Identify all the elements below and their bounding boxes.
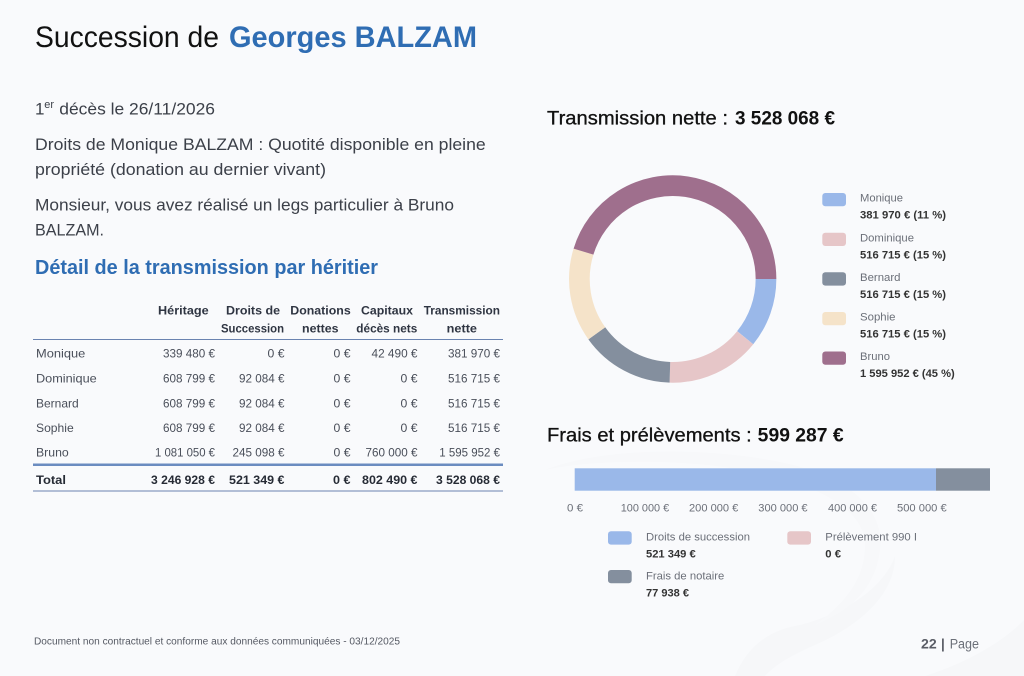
legend item: frais de notaire: Frais de notaire — [646, 571, 724, 583]
text block: introduction: décès le 26/11/2026 — [59, 100, 215, 119]
row: Total: 521 349 € — [229, 473, 285, 487]
heading: transmission nette — [547, 108, 835, 129]
donut chart: transmission nette — [579, 186, 766, 372]
row: Dominique: 608 799 € — [163, 371, 215, 385]
segment: Bernard — [597, 333, 670, 372]
legend item: Sophie — [822, 312, 946, 340]
segment: Sophie — [579, 252, 597, 333]
legend item: Bruno: Bruno — [860, 351, 890, 363]
page number: | — [941, 637, 945, 652]
heading: détail de la transmission: Détail de la transmission par héritier — [35, 257, 378, 279]
footer note: Document non contractuel et conforme aux données communiquées - 03/12/2025 — [34, 636, 400, 648]
table: transmission par héritier — [33, 304, 503, 492]
axis labels: 100 000 € — [621, 502, 669, 514]
text block: introduction: er — [44, 99, 54, 111]
row: Bernard: 608 799 € — [163, 397, 215, 411]
stacked bar chart: frais et prélèvements — [567, 468, 990, 514]
legend item: Dominique: 516 715 € (15 %) — [860, 249, 946, 261]
legend item: Bernard: 516 715 € (15 %) — [860, 289, 946, 301]
table header: Capitaux — [361, 304, 413, 318]
legend item: prélèvement 990 I: Prélèvement 990 I — [825, 532, 917, 544]
row: Dominique: 0 € — [400, 371, 418, 385]
row: Dominique: 516 715 € — [448, 371, 500, 385]
axis labels: 200 000 € — [689, 502, 738, 514]
row: Monique: 0 € — [268, 347, 285, 361]
legend: transmission nette — [822, 193, 955, 380]
segment: Monique — [745, 279, 766, 338]
title: Georges BALZAM — [229, 21, 477, 54]
text block: introduction — [35, 99, 486, 240]
row: Total: Total — [36, 473, 66, 487]
legend item: Dominique — [822, 232, 946, 261]
heading: frais et prélèvements: 599 287 € — [758, 426, 844, 447]
legend item: Monique: Monique — [860, 193, 903, 205]
row: Dominique — [36, 371, 500, 385]
row: Bruno: 1 081 050 € — [155, 446, 215, 460]
heading: frais et prélèvements — [547, 426, 844, 447]
row: Total: 0 € — [333, 473, 351, 487]
legend item: prélèvement 990 I: 0 € — [825, 549, 841, 561]
table header: nettes — [302, 321, 339, 335]
row: Bruno: 0 € — [334, 446, 351, 460]
text block: introduction: 1 — [35, 100, 44, 119]
legend item: Monique — [822, 193, 946, 222]
title: Succession de — [35, 21, 219, 54]
row: Monique: 381 970 € — [448, 347, 500, 361]
text block: introduction: Droits de Monique BALZAM : Quotité disponible en pleine — [35, 135, 486, 154]
legend item: Bernard — [822, 272, 946, 301]
page number: Page — [950, 637, 979, 652]
axis labels: 500 000 € — [897, 502, 947, 514]
heading: frais et prélèvements: Frais et prélèvements : — [547, 426, 752, 447]
row: Monique: Monique — [36, 347, 86, 361]
legend item: Dominique: Dominique — [860, 232, 914, 244]
row: Bruno: 1 595 952 € — [439, 446, 500, 460]
legend item: Sophie: Sophie — [860, 312, 896, 324]
row: Total — [36, 473, 500, 487]
segment: Dominique — [670, 338, 745, 372]
table header: Droits de — [226, 304, 280, 318]
segment: Bruno — [584, 186, 766, 279]
row: Sophie: 608 799 € — [163, 421, 215, 435]
bar: frais de notaire — [936, 468, 990, 491]
legend item: Sophie: 516 715 € (15 %) — [860, 328, 946, 340]
row: Monique: 42 490 € — [372, 347, 418, 361]
legend item: Bruno — [822, 351, 955, 380]
row: Dominique: 92 084 € — [239, 371, 285, 385]
table header — [33, 304, 503, 340]
text block: introduction: Monsieur, vous avez réalisé un legs particulier à Bruno — [35, 196, 454, 215]
table header: nette — [447, 321, 477, 335]
text block: introduction: propriété (donation au dernier vivant) — [35, 160, 326, 179]
bar: droits de succession — [575, 468, 936, 491]
row: Sophie: 0 € — [334, 421, 351, 435]
row: Total: 802 490 € — [362, 473, 418, 487]
axis labels — [567, 502, 947, 514]
legend item: droits de succession — [608, 531, 750, 561]
table header: Transmission — [424, 304, 500, 318]
row: Bernard: Bernard — [36, 397, 79, 411]
title — [35, 21, 477, 54]
legend: frais et prélèvements — [608, 531, 917, 600]
row: Total: 3 246 928 € — [151, 473, 215, 487]
row: Bernard: 0 € — [400, 397, 418, 411]
row: Monique — [36, 347, 500, 361]
table header: décès nets — [356, 321, 418, 335]
row: Bernard — [36, 397, 500, 411]
legend item: droits de succession: Droits de succession — [646, 532, 750, 544]
row: Bernard: 0 € — [334, 397, 351, 411]
legend item: prélèvement 990 I — [787, 531, 917, 561]
legend item: Bernard: Bernard — [860, 272, 900, 284]
row: Sophie: 516 715 € — [448, 421, 500, 435]
table header: Héritage — [158, 304, 209, 318]
legend item: Bruno: 1 595 952 € (45 %) — [860, 368, 955, 380]
row: Total: 3 528 068 € — [436, 473, 500, 487]
legend item: droits de succession: 521 349 € — [646, 549, 696, 561]
heading: transmission nette: Transmission nette : — [547, 108, 728, 129]
row: Dominique: Dominique — [36, 371, 97, 385]
row: Sophie: 92 084 € — [239, 421, 285, 435]
legend item: frais de notaire — [608, 570, 724, 600]
page number: 22 — [921, 637, 937, 652]
row: Sophie — [36, 421, 500, 435]
axis labels: 400 000 € — [828, 502, 877, 514]
table header: Succession — [221, 321, 284, 335]
row: Bruno: 245 098 € — [232, 446, 285, 460]
row: Bernard: 516 715 € — [448, 397, 500, 411]
row: Bruno — [36, 446, 500, 460]
row: Monique: 0 € — [334, 347, 351, 361]
row: Monique: 339 480 € — [163, 347, 215, 361]
axis labels: 300 000 € — [758, 502, 808, 514]
row: Bernard: 92 084 € — [239, 397, 285, 411]
heading: transmission nette: 3 528 068 € — [735, 108, 835, 129]
legend item: Monique: 381 970 € (11 %) — [860, 210, 946, 222]
page number — [921, 637, 979, 652]
row: Bruno: 760 000 € — [366, 446, 418, 460]
row: Sophie: 0 € — [400, 421, 418, 435]
row: Dominique: 0 € — [334, 371, 351, 385]
text block: introduction: BALZAM. — [35, 221, 104, 240]
axis labels: 0 € — [567, 502, 583, 514]
table header: Donations — [290, 304, 351, 318]
legend item: frais de notaire: 77 938 € — [646, 588, 689, 600]
row: Sophie: Sophie — [36, 421, 74, 435]
row: Bruno: Bruno — [36, 446, 69, 460]
